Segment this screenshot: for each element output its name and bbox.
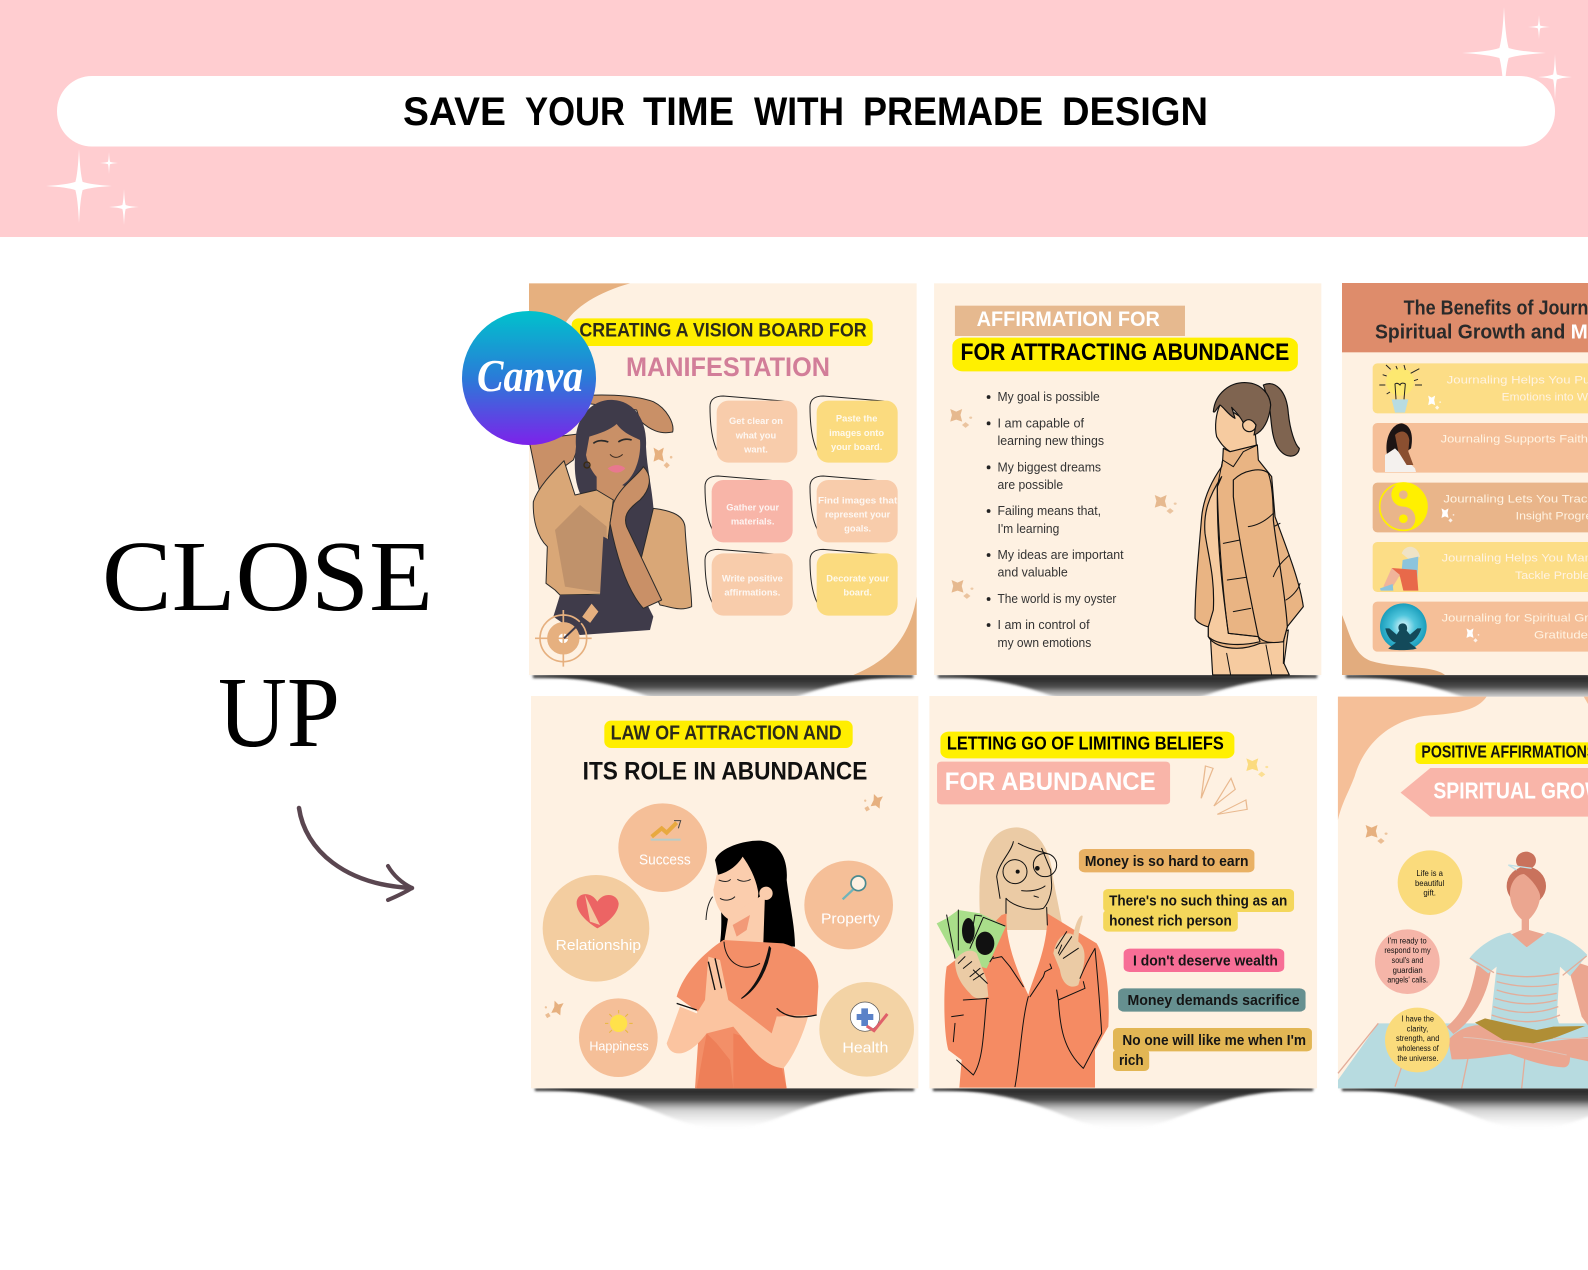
belief: no such thing as an honest rich person: honest rich person: [1109, 913, 1232, 929]
panel: step buttons: affirmations.: [724, 588, 780, 598]
belief: money demands sacrifice: [1118, 988, 1306, 1012]
circle: ready to respond: [1375, 929, 1440, 994]
affirmation list: The world is my oyster: [998, 593, 1116, 606]
panel: positive affirmations card: [1338, 697, 1588, 1088]
heading: for attracting abundance: FOR ATTRACTING ABUNDANCE: [960, 338, 1289, 365]
circle: ready to respond: respond to my: [1384, 946, 1431, 955]
heading: law of attraction: LAW OF ATTRACTION AND: [611, 722, 842, 744]
affirmation list: and valuable: [998, 566, 1068, 580]
belief: no one will like me: [1113, 1028, 1312, 1071]
circle: life is a beautiful gift: gift.: [1423, 889, 1436, 898]
sparkle: [1246, 758, 1268, 777]
heading: manifestation: MANIFESTATION: [626, 352, 830, 382]
affirmation list: Failing means that,: [998, 505, 1101, 518]
circle: clarity and strength: the universe.: [1397, 1054, 1438, 1063]
circle: life is a beautiful gift: Life is a: [1416, 869, 1444, 878]
panel: benefits of journaling card: [1342, 283, 1588, 675]
affirmation list: [987, 391, 1124, 650]
panel: step buttons: goals.: [844, 524, 871, 534]
circle: ready to respond: guardian: [1393, 966, 1423, 975]
circle: success: Success: [639, 852, 691, 868]
illustration: woman: [529, 395, 692, 635]
title pill: [57, 76, 1555, 146]
circle: success: [618, 803, 707, 892]
panel: step buttons: your board.: [831, 442, 882, 452]
heading: letting go: LETTING GO OF LIMITING BELIEFS: [947, 733, 1224, 754]
benefit bar: track insight progress: [1373, 483, 1588, 532]
panel: step buttons: Get clear on: [729, 416, 783, 426]
affirmation list: My biggest dreams: [998, 461, 1101, 475]
illustration: meditating woman: [1447, 852, 1588, 1067]
benefit bar: spiritual growth and gratitude: [1373, 602, 1588, 652]
circle: health: [819, 982, 914, 1077]
sparkles: top right: [1462, 7, 1550, 99]
panel: step buttons: Paste the: [836, 414, 877, 424]
illustration and affirmation circles: [1338, 850, 1588, 1088]
benefit bar: supports faith: Journaling Supports Faith: [1441, 434, 1588, 446]
illustration: woman in puffer jacket: [1195, 383, 1303, 675]
panel: step buttons: images onto: [829, 428, 884, 438]
circle: health: Health: [842, 1040, 888, 1056]
title text: SAVE: [403, 90, 506, 134]
sparkle: pill end: [1538, 54, 1572, 100]
sparkles: bottom left: [46, 149, 139, 225]
circle: ready to respond: I'm ready to: [1388, 936, 1427, 945]
affirmation list: learning new things: [998, 435, 1104, 448]
heading: for abundance: [937, 762, 1170, 804]
illustration: praying woman: [667, 841, 818, 1088]
header bar: [1342, 283, 1588, 352]
benefit bar: track insight progress: Journaling Lets You Track: [1443, 493, 1588, 505]
belief: money is so hard to earn: Money is so hard to earn: [1085, 854, 1248, 869]
icon: burst lines: [1201, 766, 1247, 814]
circle: life is a beautiful gift: beautiful: [1415, 879, 1445, 888]
benefit bar: spiritual growth and gratitude: Gratitude: [1534, 629, 1588, 641]
benefit bar: manage and tackle problems: Journaling Helps You Manage: [1442, 553, 1588, 565]
circle: clarity and strength: wholeness of: [1396, 1044, 1439, 1053]
panel: vision board card: [529, 283, 917, 675]
panel: step buttons: board.: [843, 588, 872, 598]
logo: canva badge: [462, 311, 596, 445]
circle: ready to respond: soul's and: [1392, 956, 1423, 965]
panel: step buttons: represent your: [825, 510, 891, 520]
affirmation list: I am in control of: [998, 619, 1090, 632]
heading: affirmation for: [955, 306, 1185, 336]
heading: letting go: [940, 732, 1234, 758]
benefit bar: supports faith: [1373, 423, 1588, 473]
benefit bar: manage and tackle problems: [1373, 542, 1588, 592]
card shadows: [529, 675, 1588, 1128]
sparkle: [654, 448, 672, 468]
affirmation list: My ideas are important: [998, 549, 1124, 562]
title text: DESIGN: [1062, 90, 1208, 134]
logo: canva badge: Canva: [477, 350, 583, 401]
belief: no such thing as an honest rich person: [1103, 889, 1294, 932]
benefit bar: put emotions into words: Journaling Helps You Put: [1447, 374, 1588, 386]
sparkles: [542, 792, 883, 1021]
circle: life is a beautiful gift: [1398, 850, 1462, 915]
panel: step buttons: Decorate your: [826, 574, 889, 584]
illustration: woman with money: [937, 827, 1109, 1088]
heading: creating a vision board: CREATING A VISION BOARD FOR: [579, 321, 867, 342]
panel: limiting beliefs card: [929, 696, 1317, 1088]
belief: i don't deserve wealth: [1124, 949, 1284, 972]
panel: step buttons: [705, 396, 898, 616]
icon: target: [535, 605, 597, 667]
heading: spiritual growth: [1401, 768, 1588, 817]
panel: step buttons: materials.: [731, 517, 774, 527]
circle: ready to respond: angels' calls.: [1387, 976, 1428, 985]
circle: relationship: Relationship: [556, 938, 641, 954]
title text: WITH: [754, 90, 844, 134]
heading: close up: [102, 520, 433, 768]
heading: its role in abundance: ITS ROLE IN ABUNDANCE: [583, 758, 867, 785]
affirmation list: my own emotions: [998, 637, 1091, 650]
circle: clarity and strength: strength, and: [1396, 1034, 1439, 1043]
circle: property: Property: [821, 911, 881, 927]
illustration: yoga mat: [1338, 1023, 1588, 1088]
circle: clarity and strength: [1385, 1008, 1450, 1072]
header band: [0, 0, 1588, 237]
panel: step buttons: what you: [735, 430, 777, 440]
arrow: [299, 808, 412, 900]
circle: relationship: [543, 875, 649, 982]
belief: no such thing as an honest rich person: There's no such thing as an: [1109, 893, 1287, 909]
panel: step buttons: Gather your: [726, 503, 779, 513]
circle: clarity and strength: clarity,: [1407, 1024, 1428, 1033]
panel: step buttons: Write positive: [722, 574, 783, 584]
heading: close up: UP: [218, 656, 340, 768]
title text: TIME: [643, 90, 734, 134]
belief: i don't deserve wealth: I don't deserve wealth: [1133, 953, 1278, 969]
circle: clarity and strength: I have the: [1401, 1014, 1435, 1023]
belief: no one will like me: No one will like me when I'm: [1122, 1033, 1306, 1048]
circle: property: [804, 861, 893, 949]
belief: money demands sacrifice: Money demands sacrifice: [1127, 993, 1300, 1008]
belief: money is so hard to earn: [1079, 849, 1254, 872]
affirmation list: are possible: [998, 479, 1063, 492]
title text: [403, 90, 1208, 134]
circle: happiness: [579, 998, 658, 1077]
affirmation list: I'm learning: [998, 523, 1059, 536]
panel: step buttons: Find images that: [818, 495, 897, 505]
sparkles: [950, 409, 1177, 599]
affirmation list: My goal is possible: [998, 391, 1100, 404]
heading: close up: CLOSE: [102, 520, 433, 632]
panel: step buttons: want.: [743, 444, 768, 454]
affirmation list: I am capable of: [998, 417, 1085, 431]
benefit bar: put emotions into words: [1373, 363, 1588, 413]
circle: happiness: Happiness: [589, 1040, 649, 1054]
heading: for abundance: FOR ABUNDANCE: [945, 768, 1156, 796]
title text: PREMADE: [863, 90, 1043, 134]
heading: benefits of journaling: Spiritual Growth and: [1375, 321, 1565, 343]
title text: YOUR: [525, 90, 625, 134]
panel: affirmation card: [934, 283, 1321, 675]
heading: benefits of journaling: [1375, 297, 1588, 343]
panel: law of attraction card: [531, 696, 918, 1088]
heading: for attracting abundance: [952, 338, 1298, 371]
sparkle: [1366, 825, 1388, 844]
belief: no one will like me: rich: [1119, 1053, 1144, 1068]
heading: affirmation for: AFFIRMATION FOR: [977, 308, 1160, 331]
